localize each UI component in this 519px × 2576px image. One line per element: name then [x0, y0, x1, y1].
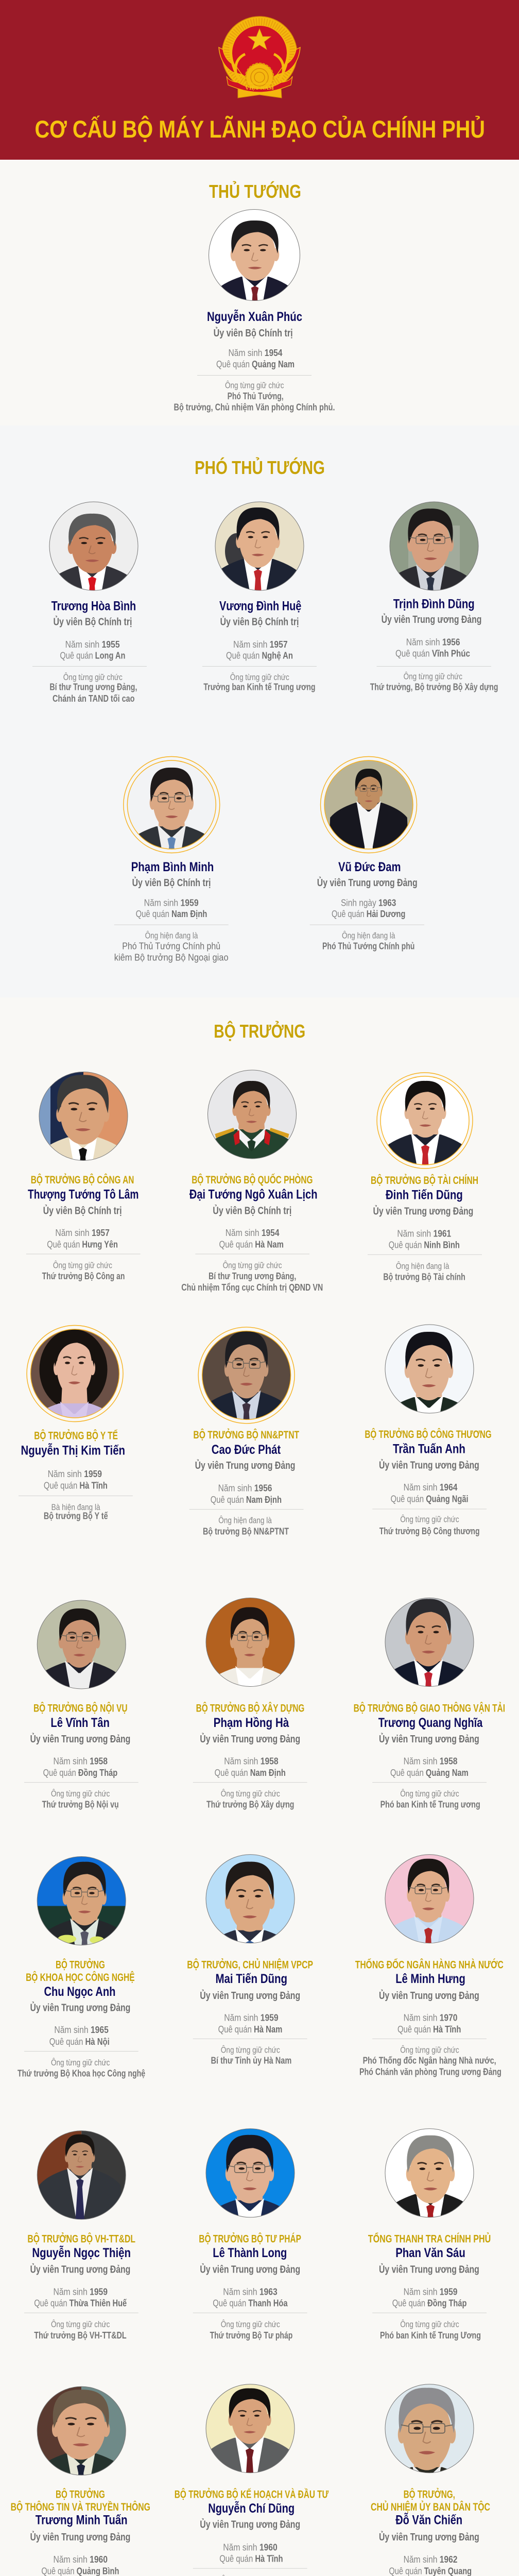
name: Phạm Bình Minh	[131, 860, 214, 874]
card: Ngô Xuân Lịch	[181, 1068, 323, 1293]
birth and hometown: Năm sinh 1955	[65, 639, 120, 650]
birth and hometown: Quê quán Quảng Nam	[216, 359, 295, 369]
portrait: Chu Ngọc Anh	[37, 1856, 126, 1945]
ministry: BỘ TRƯỞNG BỘ NN&PTNT	[193, 1429, 299, 1441]
party rank: Ủy viên Trung ương Đảng	[30, 2263, 130, 2276]
career: Ông từng giữ chức	[51, 2319, 110, 2329]
career	[322, 931, 414, 952]
party rank: Ủy viên Bộ Chính trị	[213, 1204, 291, 1216]
birth and hometown	[218, 2013, 282, 2035]
career	[114, 931, 229, 962]
party rank: Ủy viên Bộ Chính trị	[132, 876, 211, 889]
career: Thứ trưởng Bộ Công thương	[379, 1526, 480, 1536]
birth and hometown: Năm sinh 1958	[404, 1756, 457, 1766]
career: Ông từng giữ chức	[225, 380, 284, 390]
ministry	[11, 2488, 150, 2513]
birth and hometown: Năm sinh 1957	[233, 639, 288, 650]
icon: national emblem of Vietnam: CỘNG HÒA XÃ HỘI CHỦ NGHĨA	[243, 81, 276, 84]
birth and hometown: Quê quán Đồng Tháp	[43, 1768, 117, 1778]
birth and hometown	[60, 639, 125, 661]
name: Trương Quang Nghĩa	[378, 1716, 483, 1730]
ministry: BỘ TRƯỞNG BỘ CÔNG AN	[31, 1174, 134, 1186]
birth and hometown: Năm sinh 1954	[226, 1228, 279, 1238]
ministry: BỘ TRƯỞNG BỘ NỘI VỤ	[33, 1702, 128, 1714]
ministry: BỘ TRƯỞNG BỘ TƯ PHÁP	[199, 2232, 301, 2245]
career: Bí thư Tỉnh ủy Hà Nam	[211, 2056, 291, 2066]
portrait: Nguyễn Ngọc Thiện	[37, 2130, 126, 2219]
birth and hometown	[49, 2025, 110, 2047]
birth and hometown	[47, 1228, 118, 1249]
party rank: Ủy viên Trung ương Đảng	[379, 1459, 479, 1471]
party rank: Ủy viên Trung ương Đảng	[30, 2531, 130, 2543]
birth and hometown: Quê quán Hà Tĩnh	[44, 1480, 108, 1490]
name: Trần Tuấn Anh	[393, 1442, 465, 1456]
name: Mai Tiến Dũng	[215, 1972, 287, 1986]
portrait: Lê Minh Hưng	[385, 1854, 474, 1943]
name: Nguyễn Xuân Phúc	[207, 309, 302, 324]
career	[383, 1261, 465, 1282]
career: Phó ban Kinh tế Trung ương	[380, 1800, 480, 1810]
portrait: Tô Lâm	[39, 1072, 128, 1161]
career: Ông hiện đang là	[396, 1261, 449, 1271]
ministry: BỘ TRƯỞNG BỘ Y TẾ	[34, 1430, 118, 1442]
portrait: Trần Tuấn Anh	[385, 1324, 474, 1414]
party rank: Ủy viên Trung ương Đảng	[195, 1459, 295, 1471]
birth and hometown: Năm sinh 1960	[54, 2554, 108, 2565]
career: Chánh án TAND tối cao	[53, 693, 135, 704]
card: Lê Thành Long	[193, 2127, 307, 2341]
portrait: Trịnh Đình Dũng	[389, 502, 479, 590]
ministry: BỘ TRƯỞNG BỘ KẾ HOẠCH VÀ ĐẦU TƯ	[175, 2488, 329, 2501]
portrait: Trương Minh Tuấn	[33, 2384, 128, 2520]
panel: ministers	[9, 1020, 505, 2576]
card: Mai Tiến Dũng	[187, 1853, 313, 2066]
birth and hometown: Quê quán Tuyên Quang	[389, 2566, 472, 2576]
name: Nguyễn Thị Kim Tiến	[21, 1443, 125, 1458]
career: Ông từng giữ chức	[400, 2319, 459, 2329]
card: Trương Minh Tuấn	[9, 2384, 154, 2576]
birth and hometown: Quê quán Hải Dương	[332, 909, 405, 919]
birth and hometown: Năm sinh 1959	[54, 2287, 108, 2297]
party rank: Ủy viên Trung ương Đảng	[379, 2531, 479, 2543]
birth and hometown	[226, 639, 293, 661]
birth and hometown	[219, 2542, 283, 2564]
party rank: Ủy viên Trung ương Đảng	[200, 2263, 300, 2276]
birth and hometown: Năm sinh 1961	[397, 1228, 451, 1239]
career	[210, 2319, 292, 2341]
name: Trương Minh Tuấn	[36, 2513, 128, 2527]
birth and hometown: Quê quán Nam Định	[211, 1495, 282, 1505]
birth and hometown	[216, 348, 295, 369]
card: Trịnh Đình Dũng	[370, 500, 498, 692]
career: Bộ trưởng Bộ NN&PTNT	[203, 1527, 289, 1537]
birth and hometown: Quê quán Đồng Tháp	[392, 2298, 466, 2308]
heading: prime minister: THỦ TƯỚNG	[209, 180, 301, 202]
birth and hometown: Quê quán Thanh Hóa	[213, 2298, 288, 2308]
portrait: Ngô Xuân Lịch	[207, 1070, 297, 1159]
career: Ông từng giữ chức	[400, 1515, 459, 1524]
ministry: BỘ TRƯỞNG, CHỦ NHIỆM VPCP	[187, 1959, 313, 1971]
birth and hometown: Năm sinh 1962	[404, 2554, 457, 2565]
career: Ông từng giữ chức	[53, 1260, 112, 1270]
party rank: Ủy viên Trung ương Đảng	[379, 1733, 479, 1745]
card: Tô Lâm	[26, 1070, 141, 1281]
birth and hometown: Quê quán Thừa Thiên Huế	[34, 2298, 127, 2308]
name: Trịnh Đình Dũng	[393, 597, 475, 611]
ministry: BỘ TRƯỞNG	[56, 1959, 105, 1971]
party rank: Ủy viên Trung ương Đảng	[200, 1733, 300, 1745]
ministry	[371, 2488, 490, 2513]
career: kiêm Bộ trưởng Bộ Ngoại giao	[114, 952, 229, 962]
card: Phan Văn Sáu	[368, 2127, 491, 2341]
panel: deputy prime ministers	[32, 457, 498, 962]
birth and hometown	[392, 2287, 466, 2308]
name: Cao Đức Phát	[212, 1443, 281, 1457]
card: Nguyễn Chí Dũng	[175, 2382, 329, 2576]
birth and hometown	[136, 897, 207, 919]
party rank: Ủy viên Bộ Chính trị	[220, 615, 299, 628]
card: Cao Đức Phát	[189, 1327, 304, 1537]
career: Ông từng giữ chức	[400, 1789, 459, 1799]
career: Ông từng giữ chức	[230, 672, 289, 682]
career: Ông hiện đang là	[145, 931, 198, 941]
career	[181, 1260, 323, 1293]
birth and hometown: Năm sinh 1959	[48, 1469, 102, 1479]
career: Thứ trưởng Bộ Công an	[42, 1271, 125, 1281]
birth and hometown	[389, 1228, 460, 1250]
birth and hometown: Quê quán Quảng Nam	[390, 1768, 469, 1778]
name: Chu Ngọc Anh	[44, 1985, 115, 1999]
career: Phó Thủ Tướng Chính phủ	[122, 941, 220, 952]
career: Ông hiện đang là	[342, 931, 395, 941]
name: Lê Thành Long	[213, 2246, 287, 2260]
career	[206, 1789, 294, 1810]
career: Bí thư Trung ương Đảng,	[49, 682, 137, 692]
birth and hometown: Quê quán Quảng Bình	[41, 2566, 119, 2576]
birth and hometown: Năm sinh 1960	[223, 2542, 278, 2552]
birth and hometown: Quê quán Hà Nam	[218, 2024, 282, 2035]
party rank: Ủy viên Trung ương Đảng	[317, 876, 418, 889]
career: Ông từng giữ chức	[221, 1789, 280, 1799]
portrait: Phan Văn Sáu	[383, 2127, 478, 2261]
career	[203, 1515, 289, 1537]
panel: prime minister	[174, 180, 335, 413]
career: Phó ban Kinh tế Trung Ương	[380, 2330, 481, 2341]
heading: ministers: BỘ TRƯỞNG	[214, 1020, 305, 1042]
birth and hometown: Năm sinh 1965	[54, 2025, 109, 2035]
portrait: Nguyễn Xuân Phúc	[209, 209, 300, 301]
card: Lê Vĩnh Tân	[24, 1598, 139, 1810]
ministry: BỘ KHOA HỌC CÔNG NGHỆ	[26, 1971, 135, 1984]
name: Đại Tướng Ngô Xuân Lịch	[189, 1187, 317, 1201]
portrait: Trương Hòa Bình	[49, 502, 138, 590]
birth and hometown	[395, 637, 470, 658]
ministry: BỘ TRƯỞNG BỘ QUỐC PHÒNG	[192, 1174, 313, 1186]
birth and hometown	[211, 1483, 282, 1505]
portrait: Cao Đức Phát	[198, 1327, 295, 1424]
birth and hometown	[397, 2013, 461, 2035]
name: Phạm Hồng Hà	[214, 1716, 289, 1730]
career	[174, 380, 335, 413]
career	[42, 1789, 119, 1810]
birth and hometown: Quê quán Quảng Ngãi	[391, 1494, 469, 1504]
card: Vũ Đức Đam	[310, 756, 424, 952]
birth and hometown	[43, 1756, 117, 1778]
card: Nguyễn Thị Kim Tiến	[19, 1325, 133, 1521]
birth and hometown: Quê quán Hà Nội	[49, 2037, 110, 2047]
birth and hometown: Năm sinh 1964	[404, 1482, 457, 1493]
portrait: Phạm Hồng Hà	[206, 1598, 295, 1687]
party rank: Ủy viên Bộ Chính trị	[54, 615, 132, 628]
career: Ông từng giữ chức	[63, 672, 123, 682]
birth and hometown	[213, 2287, 288, 2308]
birth and hometown: Quê quán Vĩnh Phúc	[395, 648, 470, 658]
career	[49, 672, 137, 704]
name: Lê Minh Hưng	[395, 1972, 465, 1986]
portrait: Nguyễn Thị Kim Tiến	[26, 1325, 124, 1422]
birth and hometown: Năm sinh 1958	[54, 1756, 108, 1766]
career	[211, 2045, 291, 2066]
birth and hometown: Sinh ngày 1963	[341, 897, 396, 908]
birth and hometown	[219, 1228, 284, 1249]
career: Thứ trưởng Bộ Xây dựng	[206, 1800, 294, 1810]
birth and hometown	[215, 1756, 286, 1778]
name: Vương Đình Huệ	[219, 599, 301, 614]
party rank: Ủy viên Trung ương Đảng	[373, 1205, 473, 1217]
birth and hometown: Năm sinh 1970	[404, 2013, 457, 2023]
icon: national emblem of Vietnam	[219, 16, 300, 98]
career	[203, 672, 316, 692]
party rank: Ủy viên Trung ương Đảng	[382, 613, 481, 625]
portrait: Vương Đình Huệ	[215, 502, 304, 590]
career: Ông hiện đang là	[218, 1515, 272, 1525]
birth and hometown	[391, 1482, 469, 1504]
card: Chu Ngọc Anh	[18, 1855, 145, 2079]
name: Nguyễn Ngọc Thiện	[32, 2245, 131, 2260]
birth and hometown	[389, 2554, 472, 2576]
career	[34, 2319, 127, 2341]
card: Lê Minh Hưng	[355, 1853, 504, 2077]
ministry: BỘ TRƯỞNG,	[404, 2488, 455, 2501]
birth and hometown	[44, 1469, 108, 1490]
portrait: Trương Quang Nghĩa	[385, 1598, 474, 1687]
career: Bộ trưởng Bộ Tài chính	[383, 1272, 465, 1282]
career: Trưởng ban Kinh tế Trung ương	[203, 682, 316, 692]
name: Lê Vĩnh Tân	[50, 1716, 110, 1730]
party rank: Ủy viên Trung ương Đảng	[379, 1989, 479, 2002]
card: Đỗ Văn Chiến	[371, 2382, 490, 2576]
card: Vương Đình Huệ	[202, 500, 317, 692]
portrait: Mai Tiến Dũng	[206, 1854, 295, 1943]
ministry: BỘ TRƯỞNG	[56, 2488, 105, 2501]
career: Bí thư Trung ương Đảng,	[209, 1271, 296, 1281]
career: Phó Thủ Tướng,	[228, 391, 284, 401]
ministry: BỘ TRƯỞNG BỘ XÂY DỰNG	[196, 1702, 304, 1714]
career	[379, 1515, 480, 1536]
card: Trần Tuấn Anh	[365, 1323, 492, 1536]
career: Ông từng giữ chức	[223, 1260, 282, 1270]
career: Chủ nhiệm Tổng cục Chính trị QĐND VN	[181, 1282, 323, 1293]
card: Trương Hòa Bình	[32, 500, 147, 704]
birth and hometown: Quê quán Hà Nam	[219, 1239, 284, 1249]
career: Bà hiện đang là	[51, 1502, 100, 1512]
career: Thứ trưởng Bộ Tư pháp	[210, 2330, 292, 2341]
birth and hometown: Quê quán Nam Định	[215, 1768, 286, 1778]
career: Ông từng giữ chức	[51, 2058, 110, 2067]
birth and hometown: Năm sinh 1956	[218, 1483, 272, 1493]
birth and hometown: Năm sinh 1963	[223, 2287, 278, 2297]
career: Thứ trưởng Bộ VH-TT&DL	[34, 2330, 127, 2341]
portrait: Lê Thành Long	[202, 2127, 297, 2267]
birth and hometown	[41, 2554, 119, 2576]
birth and hometown: Quê quán Hà Tĩnh	[219, 2553, 283, 2564]
heading: deputy prime ministers: PHÓ THỦ TƯỚNG	[195, 456, 325, 478]
name: Vũ Đức Đam	[338, 860, 401, 874]
ministry	[26, 1959, 135, 1984]
career	[42, 1260, 125, 1281]
name: Nguyễn Chí Dũng	[208, 2500, 295, 2516]
birth and hometown	[390, 1756, 469, 1778]
party rank: Ủy viên Bộ Chính trị	[214, 327, 293, 339]
career: Ông từng giữ chức	[221, 2045, 280, 2055]
portrait: Đinh Tiến Dũng	[376, 1072, 473, 1169]
card: Phạm Bình Minh	[114, 756, 229, 962]
ministry: BỘ TRƯỞNG BỘ TÀI CHÍNH	[371, 1174, 478, 1187]
header band	[0, 0, 519, 161]
birth and hometown: Năm sinh 1957	[55, 1228, 110, 1238]
party rank: Ủy viên Bộ Chính trị	[43, 1204, 122, 1216]
birth and hometown: Năm sinh 1956	[406, 637, 460, 648]
portrait: Đỗ Văn Chiến	[379, 2382, 476, 2534]
card: Đinh Tiến Dũng	[368, 1073, 482, 1282]
birth and hometown: Quê quán Ninh Bình	[389, 1240, 460, 1250]
birth and hometown: Năm sinh 1958	[224, 1756, 279, 1766]
birth and hometown: Quê quán Hà Tĩnh	[397, 2024, 461, 2035]
name: Trương Hòa Bình	[51, 599, 136, 614]
icon: national emblem of Vietnam: VIỆT NAM	[245, 86, 274, 91]
ministry: BỘ THÔNG TIN VÀ TRUYỀN THÔNG	[11, 2501, 150, 2513]
birth and hometown: Năm sinh 1959	[404, 2287, 457, 2297]
portrait: Lê Vĩnh Tân	[37, 1600, 126, 1689]
career	[359, 2045, 501, 2077]
career	[370, 672, 498, 692]
birth and hometown: Quê quán Long An	[60, 651, 125, 661]
name: Đỗ Văn Chiến	[395, 2512, 462, 2527]
portrait: Phạm Bình Minh	[123, 756, 220, 853]
birth and hometown	[34, 2287, 127, 2308]
birth and hometown	[332, 897, 405, 919]
party rank: Ủy viên Trung ương Đảng	[200, 2518, 300, 2531]
card: Trương Quang Nghĩa	[354, 1596, 505, 1810]
ministry: BỘ TRƯỞNG BỘ VH-TT&DL	[27, 2232, 135, 2245]
career: Ông từng giữ chức	[404, 672, 462, 682]
career	[380, 1789, 480, 1810]
career: Phó Thủ Tướng Chính phủ	[322, 941, 414, 952]
career: Bộ trưởng, Chủ nhiệm Văn phòng Chính phủ.	[174, 402, 335, 413]
name: Phan Văn Sáu	[395, 2246, 465, 2260]
party rank: Ủy viên Trung ương Đảng	[30, 1733, 130, 1745]
career	[18, 2058, 145, 2079]
party rank: Ủy viên Trung ương Đảng	[200, 1989, 300, 2002]
birth and hometown: Quê quán Nam Định	[136, 909, 207, 919]
career: Thứ trưởng Bộ Nội vụ	[42, 1800, 119, 1810]
career: Ông từng giữ chức	[400, 2045, 459, 2055]
card: Phạm Hồng Hà	[193, 1596, 307, 1810]
career: Ông từng giữ chức	[221, 2319, 280, 2329]
birth and hometown: Năm sinh 1959	[144, 897, 199, 908]
career: Ông từng giữ chức	[51, 1789, 110, 1799]
portrait: Nguyễn Chí Dũng	[202, 2382, 297, 2505]
birth and hometown: Quê quán Hưng Yên	[47, 1239, 118, 1249]
card: Nguyễn Ngọc Thiện	[24, 2129, 139, 2341]
birth and hometown: Năm sinh 1959	[224, 2013, 279, 2023]
name: Thượng Tướng Tô Lâm	[28, 1187, 139, 1201]
career	[380, 2319, 481, 2341]
party rank: Ủy viên Trung ương Đảng	[379, 2263, 479, 2276]
birth and hometown: Quê quán Nghệ An	[226, 651, 293, 661]
career: Thứ trưởng Bộ Khoa học Công nghệ	[18, 2069, 145, 2079]
career: Bộ trưởng Bộ Y tế	[44, 1511, 108, 1521]
name: Đinh Tiến Dũng	[386, 1188, 463, 1202]
portrait: Vũ Đức Đam	[320, 756, 417, 859]
birth and hometown: Năm sinh 1954	[229, 348, 282, 358]
party rank: Ủy viên Trung ương Đảng	[30, 2001, 130, 2013]
career	[44, 1502, 108, 1521]
